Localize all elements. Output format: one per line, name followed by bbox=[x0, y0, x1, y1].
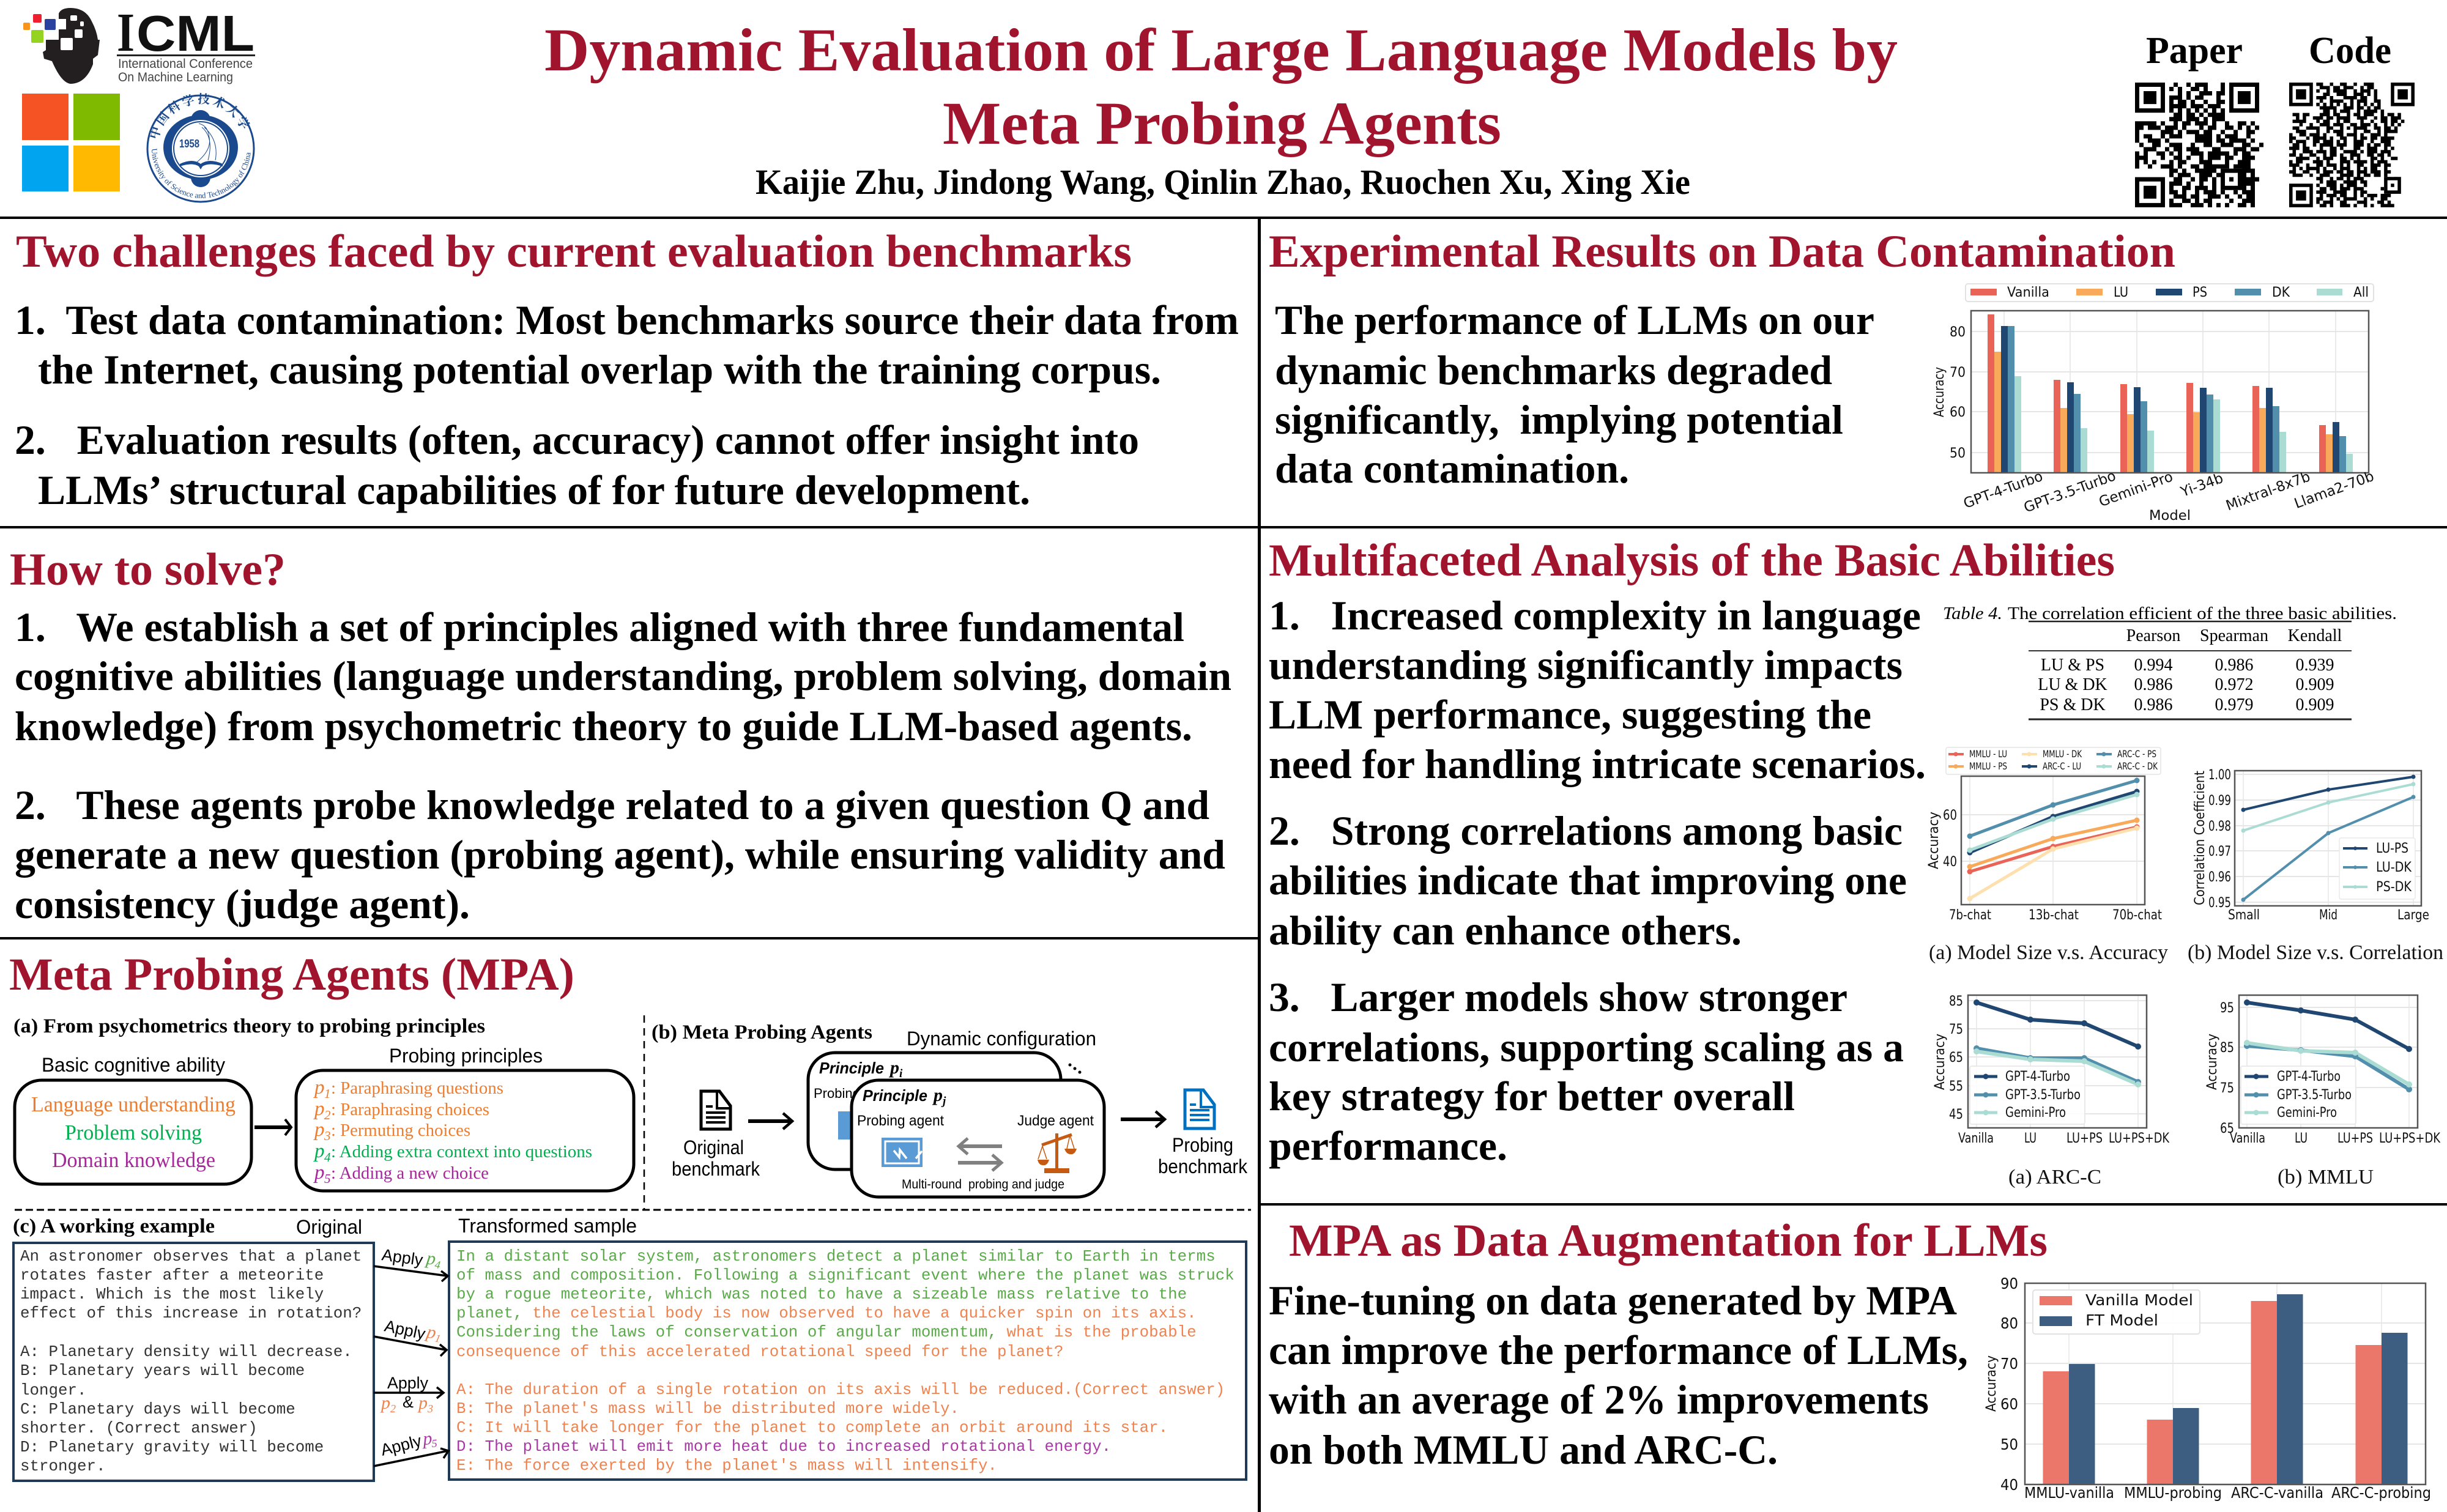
table: correlation coefficients bbox=[1943, 604, 2397, 719]
caption: ARC-C and MMLU: (b) MMLU bbox=[2278, 1166, 2374, 1188]
diagram (b): meta probing agents: (b) Meta Probing Agents bbox=[652, 1021, 872, 1043]
table: correlation coefficients: PS & DK bbox=[2040, 695, 2106, 714]
card: principle i: p bbox=[888, 1058, 899, 1078]
table: correlation coefficients: Kendall bbox=[2288, 626, 2342, 645]
box: principles: p bbox=[313, 1098, 324, 1120]
legend: ARC-C - PS bbox=[2117, 748, 2156, 760]
axis labels: 85 bbox=[1949, 994, 1963, 1009]
box: transformed question: by a rogue meteorite, which was noted to have a sizeable mass relative to the bbox=[456, 1285, 1187, 1303]
axis labels: Accuracy bbox=[2205, 1034, 2220, 1090]
legend: GPT-3.5-Turbo bbox=[2005, 1088, 2081, 1103]
heading: challenges: Two challenges faced by current evaluation benchmarks bbox=[16, 226, 1132, 277]
axis labels: 7b-chat bbox=[1949, 908, 1991, 923]
axis labels: 0.97 bbox=[2208, 844, 2231, 859]
text: contamination finding: significantly, implying potential bbox=[1275, 396, 1843, 443]
legend: LU-DK bbox=[2376, 860, 2412, 875]
box: original question: longer. bbox=[20, 1381, 87, 1399]
x axis labels: Mixtral-8x7b bbox=[2224, 469, 2312, 514]
text: augmentation finding: can improve the performance of LLMs, bbox=[1269, 1327, 1968, 1373]
box: transformed question: C: It will take longer for the planet to complete an orbit around its star. bbox=[456, 1418, 1168, 1437]
x axis labels: Llama2-70b bbox=[2292, 469, 2376, 512]
legend: MMLU - DK bbox=[2043, 748, 2082, 760]
diagram (c): working example: (c) A working example bbox=[13, 1215, 215, 1237]
legend: MMLU - LU bbox=[1969, 748, 2007, 760]
card: principle i bbox=[808, 1053, 1061, 1169]
logo: ICML bbox=[23, 2, 255, 84]
heading: how to solve: How to solve? bbox=[10, 544, 286, 595]
axis labels: 70b-chat bbox=[2112, 908, 2162, 923]
arrow: apply p5: 5 bbox=[431, 1437, 437, 1450]
axis labels: 60 bbox=[2000, 1395, 2018, 1413]
axis labels bbox=[2205, 1001, 2440, 1146]
panel: multifaceted analysis bbox=[1269, 535, 2443, 1188]
axis labels: 40 bbox=[1943, 854, 1957, 870]
box: original question: effect of this increase in rotation? bbox=[20, 1304, 362, 1322]
x axis labels: Model bbox=[2149, 508, 2191, 524]
box: original question: An astronomer observes that a planet bbox=[20, 1247, 362, 1266]
logo: ICML: I bbox=[117, 2, 135, 63]
axis labels: Accuracy bbox=[1933, 1034, 1948, 1090]
axis labels: 0.96 bbox=[2208, 870, 2231, 885]
title: Dynamic Evaluation of Large Language Models by bbox=[544, 16, 1898, 84]
text: analysis findings: LLM performance, suggesting the bbox=[1269, 691, 1871, 738]
arrow: apply p2 and p3: 2 bbox=[390, 1403, 396, 1415]
arrow: apply p2 and p3: p bbox=[380, 1393, 390, 1413]
box: principles: p bbox=[313, 1140, 324, 1162]
label: dynamic configuration: Dynamic configuration bbox=[907, 1028, 1096, 1050]
legend: GPT-4-Turbo bbox=[2005, 1069, 2070, 1084]
box: original question: shorter. (Correct answer) bbox=[20, 1419, 258, 1437]
axis labels: 85 bbox=[2220, 1040, 2234, 1056]
text: analysis findings: performance. bbox=[1269, 1122, 1507, 1169]
box: principles bbox=[296, 1070, 634, 1191]
label: probing benchmark: benchmark bbox=[1158, 1155, 1248, 1177]
y axis labels: 80 bbox=[1950, 325, 1966, 340]
y axis labels: 60 bbox=[1950, 405, 1966, 420]
arrow: apply p4: 4 bbox=[434, 1258, 441, 1271]
title bbox=[544, 16, 1898, 157]
card: principle i: Probing bbox=[814, 1086, 860, 1101]
label: original: Original bbox=[296, 1216, 362, 1238]
logo: ICML: CML bbox=[136, 5, 254, 62]
QR: paper bbox=[2135, 30, 2263, 207]
logo: USTC: 中国科学技术大学 bbox=[149, 93, 250, 138]
x axis labels bbox=[1961, 468, 2376, 524]
axis labels: Vanilla bbox=[2230, 1131, 2265, 1146]
table: correlation coefficients: 0.994 bbox=[2134, 656, 2173, 675]
caption: ARC-C and MMLU bbox=[2008, 1166, 2374, 1188]
box: transformed question: consequence of this accelerated rotational speed for the planet? bbox=[456, 1343, 1064, 1361]
box: principles: 1 bbox=[324, 1086, 330, 1101]
text: analysis findings bbox=[1269, 592, 1926, 1169]
box: transformed question: Considering the laws of conservation of angular momentum, what is the probable bbox=[456, 1323, 1197, 1341]
axis labels: 65 bbox=[2220, 1121, 2234, 1136]
bar chart: accuracy by model bbox=[1932, 284, 2376, 524]
axis labels: LU+PS bbox=[2337, 1131, 2373, 1146]
diagram (b): meta probing agents bbox=[652, 1021, 1248, 1197]
arrow: apply p5 bbox=[374, 1428, 448, 1466]
arrow: apply p1: Apply bbox=[383, 1317, 428, 1343]
axis labels: ARC-C-probing bbox=[2331, 1484, 2431, 1502]
ellipsis dots bbox=[1068, 1063, 1082, 1074]
axis labels: 60 bbox=[1943, 808, 1957, 823]
icon: probing document bbox=[1185, 1090, 1214, 1128]
box: original question bbox=[13, 1243, 374, 1481]
text: analysis findings: understanding significantly impacts bbox=[1269, 642, 1903, 688]
text: solution list: 2. These agents probe knowledge related to a given question Q and bbox=[15, 782, 1209, 828]
text: analysis findings: abilities indicate that improving one bbox=[1269, 857, 1907, 903]
axis labels: 65 bbox=[1949, 1050, 1963, 1065]
box: principles: 3 bbox=[324, 1128, 330, 1143]
table: correlation coefficients: 0.986 bbox=[2134, 695, 2173, 714]
arrow: apply p2 and p3: 3 bbox=[427, 1403, 433, 1415]
icon: probing board bbox=[882, 1138, 923, 1167]
table: correlation coefficients: Spearman bbox=[2200, 626, 2268, 645]
axis labels: 1.00 bbox=[2208, 768, 2231, 783]
arrow: abilities to principles bbox=[254, 1119, 291, 1135]
legend bbox=[2241, 1066, 2356, 1124]
table: correlation coefficients: 0.972 bbox=[2215, 675, 2254, 694]
x axis labels: Yi-34b bbox=[2178, 470, 2226, 500]
table: correlation coefficients: Table 4. bbox=[1943, 604, 2002, 623]
arrow: apply p1: 1 bbox=[434, 1332, 442, 1345]
caption: model size charts bbox=[1929, 941, 2443, 964]
axis labels bbox=[2193, 768, 2429, 923]
heading: data augmentation: MPA as Data Augmentation for LLMs bbox=[1289, 1215, 2048, 1266]
box: principles: : Adding extra context into questions bbox=[331, 1142, 592, 1162]
diagram (a): psychometrics to principles bbox=[13, 1015, 634, 1191]
legend: PS bbox=[2193, 285, 2207, 300]
diagram (a): psychometrics to principles: (a) From psychometrics theory to probing principles bbox=[13, 1015, 485, 1037]
axis labels bbox=[1984, 1275, 2431, 1502]
legend: PS-DK bbox=[2376, 880, 2412, 895]
axis labels: Mid bbox=[2319, 908, 2337, 923]
diagram (c): working example bbox=[13, 1215, 1246, 1481]
text: solution list: knowledge) from psychometric theory to guide LLM-based agents. bbox=[15, 703, 1192, 749]
text: challenges list: 2. Evaluation results (often, accuracy) cannot offer insight into bbox=[15, 417, 1139, 463]
arrow: apply p5: Apply bbox=[379, 1431, 423, 1459]
axis labels bbox=[1926, 808, 2162, 923]
card: principle i: Principle bbox=[819, 1059, 884, 1077]
text: analysis findings: correlations, supporting scaling as a bbox=[1269, 1024, 1904, 1070]
box: principles: 5 bbox=[324, 1171, 330, 1186]
caption: model size charts: (b) Model Size v.s. Correlation bbox=[2188, 941, 2443, 964]
label: original benchmark: Original bbox=[683, 1136, 744, 1158]
axis labels: 13b-chat bbox=[2029, 908, 2079, 923]
axis labels: 80 bbox=[2000, 1314, 2018, 1332]
axis labels: 90 bbox=[2000, 1275, 2018, 1292]
box: principles: : Paraphrasing questions bbox=[331, 1078, 503, 1098]
axis labels: 0.99 bbox=[2208, 793, 2231, 809]
axis labels: LU bbox=[2024, 1131, 2037, 1146]
axis labels: MMLU-probing bbox=[2124, 1484, 2222, 1502]
text: solution list: generate a new question (probing agent), while ensuring validity and bbox=[15, 831, 1225, 878]
table: correlation coefficients: 0.909 bbox=[2295, 675, 2334, 694]
y axis labels: 50 bbox=[1950, 446, 1966, 461]
label: probing benchmark: Probing bbox=[1172, 1134, 1233, 1156]
axis labels: 55 bbox=[1949, 1079, 1963, 1094]
logo: ICML: International Conference bbox=[118, 57, 253, 71]
authors: Kaijie Zhu, Jindong Wang, Qinlin Zhao, Ruochen Xu, Xing Xie bbox=[756, 162, 1690, 202]
heading: multifaceted analysis: Multifaceted Analysis of the Basic Abilities bbox=[1269, 535, 2115, 586]
caption: model size charts: (a) Model Size v.s. Accuracy bbox=[1929, 941, 2168, 964]
box: principles: p bbox=[313, 1162, 324, 1184]
box: principles: p bbox=[313, 1119, 324, 1141]
logo: ICML: On Machine Learning bbox=[118, 70, 233, 84]
arrow: out of agents bbox=[1121, 1111, 1165, 1127]
text: analysis findings: 2. Strong correlations among basic bbox=[1269, 807, 1903, 854]
y axis labels bbox=[1932, 325, 1966, 461]
caption: ARC-C and MMLU: (a) ARC-C bbox=[2008, 1166, 2101, 1188]
axis labels bbox=[1933, 994, 2169, 1146]
y axis labels: 70 bbox=[1950, 365, 1966, 380]
box: original question: A: Planetary density will decrease. bbox=[20, 1343, 352, 1361]
arrow: apply p4: p bbox=[424, 1248, 437, 1269]
text: augmentation finding: with an average of 2% improvements bbox=[1269, 1376, 1929, 1423]
legend: GPT-4-Turbo bbox=[2277, 1069, 2341, 1084]
text: challenges list bbox=[15, 297, 1239, 513]
axis labels: MMLU-vanilla bbox=[2024, 1484, 2114, 1502]
box: transformed question: of mass and composition. Following a significant event where the planet was struck bbox=[456, 1266, 1235, 1284]
text: challenges list: the Internet, causing potential overlap with the training corpus. bbox=[38, 346, 1161, 393]
line chart: ARC-C bbox=[1933, 994, 2169, 1146]
axis labels: 45 bbox=[1949, 1107, 1963, 1122]
axis labels: LU+PS+DK bbox=[2109, 1131, 2169, 1146]
table: correlation coefficients: 0.909 bbox=[2295, 695, 2334, 714]
table: correlation coefficients: Pearson bbox=[2126, 626, 2180, 645]
legend: LU-PS bbox=[2376, 841, 2408, 856]
label: probing agent: Probing agent bbox=[857, 1113, 944, 1129]
legend: MMLU - PS bbox=[1969, 760, 2007, 772]
axis labels: Small bbox=[2228, 908, 2260, 923]
x axis labels: GPT-3.5-Turbo bbox=[2022, 468, 2118, 516]
box: original question: D: Planetary gravity will become bbox=[20, 1438, 324, 1456]
text: solution list: consistency (judge agent). bbox=[15, 881, 470, 927]
box: transformed question: B: The planet's mass will be distributed more widely. bbox=[456, 1399, 959, 1418]
text: analysis findings: ability can enhance others. bbox=[1269, 907, 1742, 954]
axis labels: 70 bbox=[2000, 1355, 2018, 1373]
text: challenges list: 1. Test data contamination: Most benchmarks source their data from bbox=[15, 297, 1239, 343]
arrow: apply p2 and p3: & bbox=[403, 1393, 414, 1411]
legend: ARC-C - LU bbox=[2043, 760, 2081, 772]
arrow: apply p4: Apply bbox=[381, 1245, 425, 1269]
icon: original document bbox=[701, 1091, 730, 1129]
QR: code bbox=[2289, 30, 2415, 207]
text: augmentation finding: on both MMLU and ARC-C. bbox=[1269, 1426, 1778, 1473]
arrow: apply p2 and p3 bbox=[374, 1374, 444, 1415]
legend: DK bbox=[2272, 285, 2290, 300]
axis labels: Large bbox=[2397, 908, 2429, 923]
box: transformed question: A: The duration of a single rotation on its axis will be reduced.(Correct answer) bbox=[456, 1380, 1225, 1399]
box: abilities: Domain knowledge bbox=[52, 1148, 215, 1172]
arrow: apply p2 and p3: Apply bbox=[387, 1374, 428, 1392]
text: solution list: cognitive abilities (language understanding, problem solving, domain bbox=[15, 653, 1231, 699]
x axis labels: Gemini-Pro bbox=[2097, 469, 2175, 510]
heading: experimental results: Experimental Results on Data Contamination bbox=[1269, 226, 2175, 277]
label: probing benchmark bbox=[1158, 1134, 1248, 1177]
bar chart: vanilla vs fine-tuned bbox=[1984, 1275, 2431, 1502]
logo: USTC: 1958 bbox=[179, 138, 199, 150]
text: augmentation finding: Fine-tuning on data generated by MPA bbox=[1269, 1277, 1957, 1324]
box: transformed question bbox=[449, 1242, 1246, 1480]
legend bbox=[1970, 1066, 2085, 1124]
panel: two challenges bbox=[15, 226, 1239, 513]
heading: MPA: Meta Probing Agents (MPA) bbox=[9, 949, 574, 1000]
box: original question: B: Planetary years will become bbox=[20, 1362, 305, 1380]
box: transformed question: E: The force exerted by the planet's mass will intensify. bbox=[456, 1456, 997, 1475]
text: analysis findings: need for handling intricate scenarios. bbox=[1269, 741, 1926, 787]
legend bbox=[2339, 838, 2415, 899]
legend: All bbox=[2353, 285, 2369, 300]
axis labels: Accuracy bbox=[1926, 812, 1942, 869]
legend: Gemini-Pro bbox=[2277, 1105, 2337, 1121]
legend: GPT-3.5-Turbo bbox=[2277, 1088, 2352, 1103]
table: correlation coefficients: 0.986 bbox=[2134, 675, 2173, 694]
text: contamination finding: dynamic benchmarks degraded bbox=[1275, 347, 1832, 393]
logo: USTC: University of Science and Technology of China bbox=[152, 148, 251, 198]
logo: USTC bbox=[147, 93, 254, 203]
axis labels: 75 bbox=[2220, 1081, 2234, 1096]
logo: Microsoft bbox=[22, 94, 120, 191]
table: correlation coefficients: LU & PS bbox=[2041, 656, 2104, 675]
label: probing principles: Probing principles bbox=[389, 1045, 543, 1067]
axis labels: Correlation Coefficient bbox=[2193, 771, 2208, 905]
table: correlation coefficients: 0.939 bbox=[2295, 656, 2334, 675]
line chart: model size vs correlation bbox=[2193, 768, 2429, 923]
arrow: apply p5: p bbox=[421, 1428, 433, 1449]
legend: Vanilla Model bbox=[2085, 1291, 2193, 1309]
legend bbox=[1946, 747, 2161, 774]
legend bbox=[2033, 1290, 2200, 1334]
text: contamination finding: The performance of LLMs on our bbox=[1275, 297, 1874, 343]
text: contamination finding: data contamination. bbox=[1275, 445, 1629, 492]
table: correlation coefficients: LU & DK bbox=[2038, 675, 2107, 694]
panel: data augmentation bbox=[1269, 1215, 2431, 1502]
axis labels: Accuracy bbox=[1984, 1355, 1999, 1412]
legend: LU bbox=[2114, 285, 2128, 300]
QR: code: Code bbox=[2309, 30, 2391, 72]
icon: multi-round arrows bbox=[958, 1138, 1002, 1171]
panel: how to solve bbox=[10, 544, 1231, 927]
icon: scale bbox=[1038, 1133, 1077, 1173]
box: abilities bbox=[15, 1080, 251, 1184]
arrow: apply p1 bbox=[374, 1317, 447, 1356]
card: principle j: j bbox=[941, 1095, 946, 1108]
label: basic cognitive ability: Basic cognitive ability bbox=[42, 1054, 225, 1076]
label: original benchmark bbox=[672, 1136, 760, 1180]
axis labels: 0.95 bbox=[2208, 895, 2231, 911]
legend: FT Model bbox=[2085, 1311, 2158, 1329]
box: transformed question: In a distant solar system, astronomers detect a planet similar to Earth in terms bbox=[456, 1247, 1216, 1266]
text: solution list bbox=[15, 604, 1231, 927]
axis labels: 50 bbox=[2000, 1436, 2018, 1453]
axis labels: 75 bbox=[1949, 1022, 1963, 1037]
card: principle j bbox=[852, 1080, 1104, 1197]
box: principles: : Paraphrasing choices bbox=[331, 1100, 489, 1119]
card: principle i: i bbox=[899, 1067, 903, 1080]
label: transformed sample: Transformed sample bbox=[458, 1215, 637, 1237]
axis labels: Vanilla bbox=[1958, 1131, 1994, 1146]
box: original question: rotates faster after a meteorite bbox=[20, 1266, 324, 1284]
text: contamination finding bbox=[1275, 297, 1874, 492]
axis labels: LU+PS bbox=[2066, 1131, 2103, 1146]
box: principles: p bbox=[313, 1077, 324, 1099]
box: original question: C: Planetary days will become bbox=[20, 1400, 295, 1418]
axis labels: 95 bbox=[2220, 1001, 2234, 1016]
card: principle j: Principle bbox=[863, 1086, 927, 1105]
text: analysis findings: 1. Increased complexity in language bbox=[1269, 592, 1921, 639]
table: correlation coefficients: 0.979 bbox=[2215, 695, 2254, 714]
arrow: apply p2 and p3: p bbox=[417, 1393, 428, 1413]
x axis labels: GPT-4-Turbo bbox=[1961, 469, 2045, 512]
axis labels: 40 bbox=[2000, 1476, 2018, 1494]
arrow: apply p4 bbox=[374, 1245, 448, 1281]
panel: data contamination results bbox=[1269, 226, 2376, 524]
box: principles: 2 bbox=[324, 1108, 331, 1122]
text: analysis findings: 3. Larger models show stronger bbox=[1269, 974, 1847, 1020]
box: principles: 4 bbox=[324, 1150, 331, 1165]
dashed separators bbox=[15, 1015, 1251, 1210]
label: multi-round: Multi-round probing and judge bbox=[902, 1177, 1064, 1191]
label: original benchmark: benchmark bbox=[672, 1158, 760, 1180]
box: transformed question: planet, the celestial body is now observed to have a quicker spin on its axis. bbox=[456, 1304, 1197, 1322]
y axis labels: Accuracy bbox=[1932, 367, 1947, 417]
arrow: apply p1: p bbox=[424, 1321, 438, 1343]
panel: meta probing agents bbox=[9, 949, 1251, 1481]
legend bbox=[1966, 284, 2374, 302]
text: analysis findings: key strategy for better overall bbox=[1269, 1073, 1795, 1119]
legend: Vanilla bbox=[2007, 285, 2049, 300]
legend: Gemini-Pro bbox=[2005, 1105, 2066, 1121]
box: abilities: Language understanding bbox=[31, 1092, 236, 1116]
title: Meta Probing Agents bbox=[943, 89, 1501, 157]
table: correlation coefficients: 0.986 bbox=[2215, 656, 2254, 675]
header band bbox=[22, 2, 2415, 207]
label: judge agent: Judge agent bbox=[1017, 1113, 1094, 1129]
line chart: MMLU bbox=[2205, 995, 2440, 1146]
text: augmentation finding bbox=[1269, 1277, 1968, 1473]
box: principles: : Permuting choices bbox=[331, 1121, 470, 1140]
box: principles: : Adding a new choice bbox=[331, 1163, 489, 1183]
text: solution list: 1. We establish a set of principles aligned with three fundamental bbox=[15, 604, 1184, 650]
card: principle j: p bbox=[932, 1085, 943, 1105]
box: original question: impact. Which is the most likely bbox=[20, 1285, 324, 1303]
arrow: into agents bbox=[748, 1113, 792, 1129]
axis labels: 0.98 bbox=[2208, 819, 2231, 834]
box: transformed question: D: The planet will emit more heat due to increased rotational energy. bbox=[456, 1437, 1111, 1456]
axis labels: LU bbox=[2295, 1131, 2308, 1146]
box: original question: stronger. bbox=[20, 1457, 106, 1475]
legend: ARC-C - DK bbox=[2117, 760, 2158, 772]
line chart: model size vs accuracy bbox=[1926, 747, 2162, 923]
QR: paper: Paper bbox=[2146, 30, 2243, 72]
text: challenges list: LLMs’ structural capabilities of for future development. bbox=[38, 467, 1030, 513]
box: abilities: Problem solving bbox=[65, 1121, 202, 1144]
axis labels: ARC-C-vanilla bbox=[2231, 1484, 2323, 1502]
table: correlation coefficients: The correlation efficient of the three basic abilities. bbox=[2008, 604, 2397, 623]
